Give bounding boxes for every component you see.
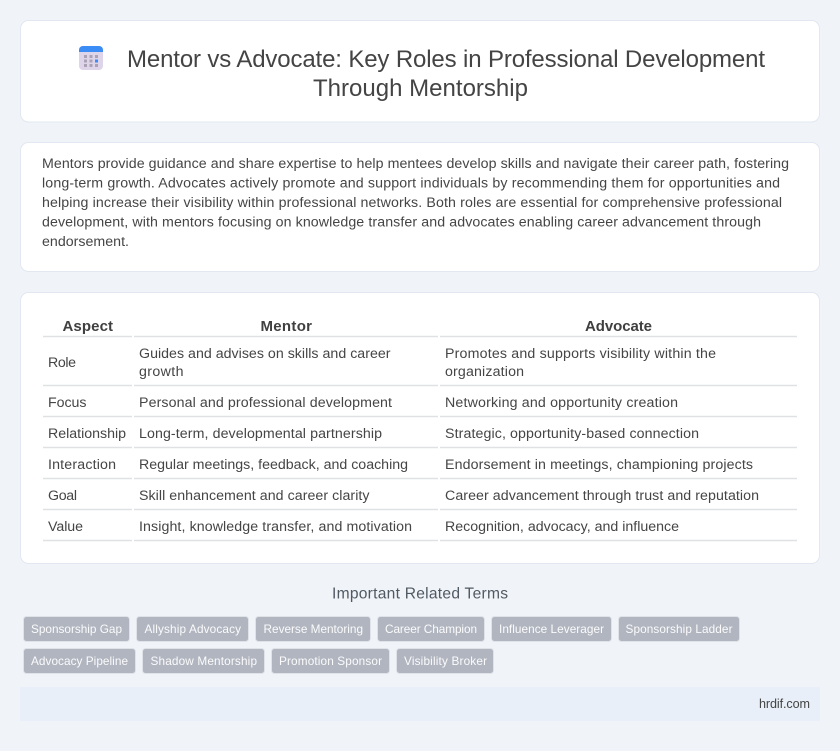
title: Mentor vs Advocate: Key Roles in Professional Development	[127, 46, 765, 73]
row: interaction: Interaction	[48, 457, 116, 473]
related terms tags	[24, 616, 740, 674]
table header row: Mentor	[260, 318, 312, 335]
text block: description	[42, 156, 789, 250]
row: role: organization	[445, 364, 524, 380]
row: value: Insight, knowledge transfer, and motivation	[139, 519, 412, 535]
heading: related terms: Important Related Terms	[332, 586, 508, 602]
tag: Shadow Mentorship	[142, 648, 264, 674]
row: focus: Networking and opportunity creation	[445, 395, 678, 411]
tag: Sponsorship Ladder: Sponsorship Ladder	[626, 622, 733, 636]
tag: Visibility Broker	[396, 648, 494, 674]
row: relationship	[48, 426, 699, 442]
panel: header	[20, 20, 820, 122]
text block: description: development, with mentors focusing on knowledge transfer and advocates enabling career advancement through	[42, 214, 761, 230]
tag: Advocacy Pipeline: Advocacy Pipeline	[31, 654, 128, 668]
row: interaction: Endorsement in meetings, championing projects	[445, 457, 753, 473]
footer bar	[20, 687, 820, 721]
text block: description: long-term growth. Advocates actively promote and support individuals by recommending them for opportunities and	[42, 176, 780, 192]
row: relationship: Relationship	[48, 426, 126, 442]
row: role: Guides and advises on skills and career	[139, 346, 391, 362]
table header row: Aspect	[62, 318, 113, 335]
row: focus: Personal and professional development	[139, 395, 392, 411]
panel: description	[20, 142, 820, 272]
tag: Influence Leverager: Influence Leverager	[499, 622, 604, 636]
tag: Influence Leverager	[492, 616, 612, 642]
tag: Advocacy Pipeline	[24, 648, 136, 674]
row: goal: Skill enhancement and career clarity	[139, 488, 370, 504]
row: role	[48, 346, 716, 380]
row: focus: Focus	[48, 395, 86, 411]
row: value	[48, 519, 679, 535]
tag: Reverse Mentoring	[256, 616, 370, 642]
text block: description: endorsement.	[42, 234, 129, 250]
title	[127, 46, 765, 102]
text block: description: Mentors provide guidance and share expertise to help mentees develop skills and navigate their career path, fostering	[42, 156, 789, 172]
row: relationship: Strategic, opportunity-based connection	[445, 426, 699, 442]
title: Through Mentorship	[313, 75, 528, 102]
tag: Sponsorship Ladder	[618, 616, 740, 642]
row: interaction	[48, 457, 753, 473]
row: value: Value	[48, 519, 83, 535]
panel: comparison table	[20, 292, 820, 564]
tag: Reverse Mentoring: Reverse Mentoring	[264, 622, 363, 636]
row: relationship: Long-term, developmental partnership	[139, 426, 382, 442]
row: goal	[48, 488, 759, 504]
tag: Allyship Advocacy: Allyship Advocacy	[144, 622, 241, 636]
tag: Promotion Sponsor	[272, 648, 390, 674]
tag: Sponsorship Gap	[24, 616, 130, 642]
row: goal: Goal	[48, 488, 77, 504]
table header row: Advocate	[585, 318, 652, 335]
row: role: growth	[139, 364, 184, 380]
row: role: Role	[48, 355, 76, 371]
tag: Career Champion: Career Champion	[385, 622, 477, 636]
footer source: hrdif.com	[759, 697, 810, 711]
row: role: Promotes and supports visibility within the	[445, 346, 716, 362]
tag: Shadow Mentorship: Shadow Mentorship	[150, 654, 257, 668]
text block: description: helping increase their visibility within professional networks. Both roles are essential for comprehensive professional	[42, 195, 782, 211]
tag: Career Champion	[378, 616, 484, 642]
table header row	[62, 318, 652, 335]
row: value: Recognition, advocacy, and influence	[445, 519, 679, 535]
tag: Visibility Broker: Visibility Broker	[404, 654, 487, 668]
icon: calendar	[79, 46, 103, 70]
row: goal: Career advancement through trust and reputation	[445, 488, 759, 504]
row: focus	[48, 395, 678, 411]
tag: Promotion Sponsor: Promotion Sponsor	[279, 654, 382, 668]
tag: Allyship Advocacy	[136, 616, 248, 642]
tag: Sponsorship Gap: Sponsorship Gap	[31, 622, 122, 636]
row: interaction: Regular meetings, feedback, and coaching	[139, 457, 408, 473]
